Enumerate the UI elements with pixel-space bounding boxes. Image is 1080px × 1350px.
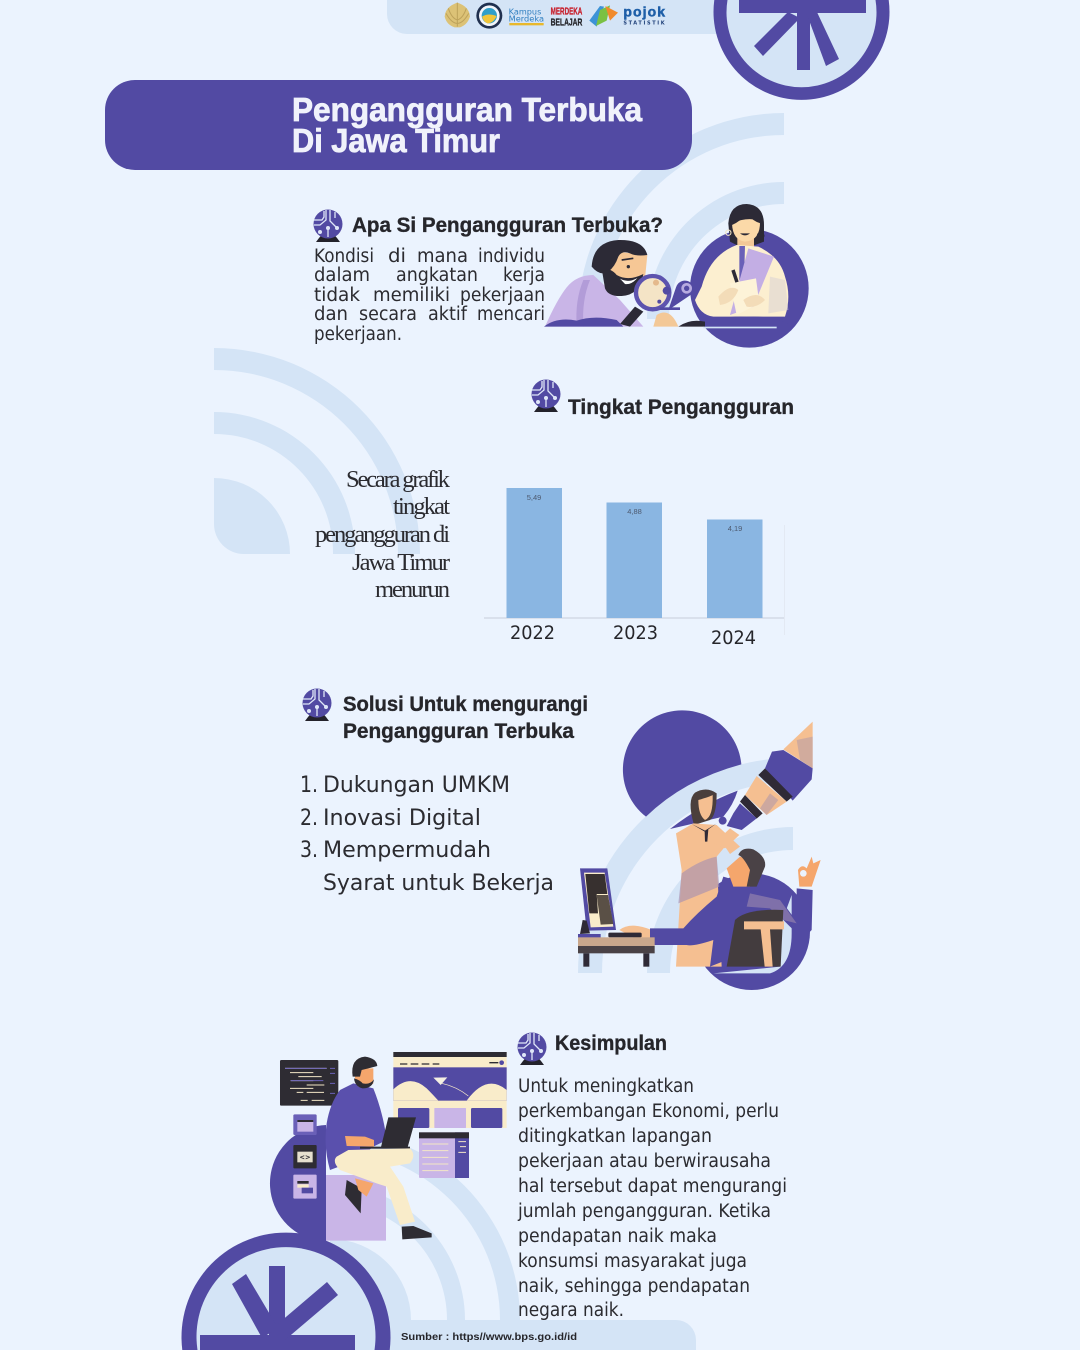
logo: Merdeka Belajar: BELAJAR [551, 17, 583, 28]
section: unemployment rate [532, 380, 794, 419]
footer bar [380, 1320, 696, 1350]
bar: 2023: 4,88 [627, 507, 642, 516]
decoration: signal arcs upper right [578, 113, 784, 319]
text block: definition: dan [314, 304, 348, 325]
text block: conclusion: ditingkatkan lapangan [518, 1126, 712, 1147]
source note: Sumber : https//www.bps.go.id/id [401, 1331, 577, 1343]
illustration: developer at laptop [270, 1052, 507, 1241]
document panel [419, 1132, 469, 1178]
man [619, 849, 821, 967]
logo: Tut Wuri Handayani [445, 3, 470, 27]
title: Pengangguran Terbuka [292, 91, 643, 128]
logo bar [387, 0, 721, 34]
bar: 2024: 4,19 [728, 524, 742, 533]
text block: chart commentary: menurun [375, 576, 450, 603]
code panel [280, 1060, 338, 1106]
text block: chart commentary [315, 466, 451, 603]
telescope [727, 722, 813, 830]
text block: definition: pekerjaan [460, 285, 545, 306]
title [292, 91, 643, 159]
bar: 2023 [606, 502, 662, 618]
heading: solutions: Pengangguran Terbuka [343, 719, 575, 743]
logo: Pojok Statistik: STATISTIK [623, 21, 666, 27]
text block: chart commentary: pengangguran di [315, 521, 450, 548]
text block: chart commentary: tingkat [393, 493, 450, 520]
bar: 2022 [506, 488, 562, 618]
text block: definition: dalam [314, 265, 370, 286]
half moon [623, 710, 741, 817]
list: solutions: 3. [300, 837, 318, 863]
heading: conclusion: Kesimpulan [555, 1031, 667, 1055]
logo: Kampus Merdeka [509, 7, 544, 25]
illustration: telescope and astronomers [578, 710, 821, 990]
ground [544, 316, 794, 327]
bar: 2024 [707, 520, 762, 618]
list: solutions: 2. [300, 805, 318, 831]
title: Di Jawa Timur [292, 122, 500, 159]
logo: Pojok Statistik: pojok [623, 4, 665, 20]
heading: solutions: Solusi Untuk mengurangi [343, 692, 588, 716]
logo: Kampus Merdeka: Kampus [509, 7, 541, 16]
list: solutions: Syarat untuk Bekerja [323, 870, 554, 896]
text block: definition: memiliki [373, 285, 450, 306]
text block: conclusion: jumlah pengangguran. Ketika [517, 1201, 771, 1222]
text block: definition: mana [417, 246, 468, 267]
text block: conclusion: hal tersebut dapat mengurangi [518, 1176, 787, 1197]
magnifier and pin [620, 276, 694, 327]
illustration: researchers with magnifier [544, 204, 809, 348]
list: solutions: Dukungan UMKM [323, 772, 510, 798]
icon: circuit globe [314, 210, 342, 242]
desk and monitor [578, 868, 655, 967]
list: solutions: Inovasi Digital [323, 805, 481, 831]
text block: definition: individu [478, 246, 545, 267]
text block: conclusion: negara naik. [518, 1300, 624, 1321]
logo: Merdeka Belajar [551, 7, 583, 28]
axis labels [510, 622, 756, 649]
woman [676, 789, 740, 967]
text block: conclusion: naik, sehingga pendapatan [518, 1276, 750, 1297]
box seat [326, 1175, 386, 1241]
text block: conclusion: pendapatan naik maka [518, 1226, 717, 1247]
text block: conclusion: pekerjaan atau berwirausaha [518, 1151, 771, 1172]
text block: definition: pekerjaan. [314, 324, 402, 345]
list: solutions [300, 772, 554, 896]
decoration: signal arcs middle left [214, 348, 420, 554]
small cards [293, 1114, 317, 1199]
text block: definition [314, 246, 545, 345]
man [545, 240, 647, 327]
text block: definition: Kondisi [314, 246, 374, 267]
decoration: signal arcs lower right [578, 758, 793, 973]
text block: chart commentary: Jawa Timur [352, 549, 450, 576]
small cards: <> [299, 1153, 311, 1161]
list: solutions: 1. [300, 772, 318, 798]
text block: conclusion: konsumsi masyarakat juga [518, 1251, 747, 1272]
logo: Pojok Statistik [623, 4, 666, 27]
section: solutions [300, 688, 588, 896]
section: definition [314, 210, 663, 345]
chair [727, 910, 784, 967]
emblem: ring bottom left [182, 1233, 390, 1350]
text block: conclusion: Untuk meningkatkan [518, 1076, 694, 1097]
logo: university badge [476, 3, 502, 29]
icon: circuit globe [518, 1032, 546, 1065]
axis labels: 2024 [711, 627, 756, 649]
icon: circuit globe [532, 380, 560, 412]
logo: Kampus Merdeka: Merdeka [509, 14, 544, 23]
text block: definition: angkatan [396, 265, 478, 286]
text block: chart commentary: Secara grafik [346, 466, 451, 493]
text block: conclusion [517, 1076, 787, 1321]
ring [693, 873, 810, 990]
text block: definition: tidak [314, 285, 360, 306]
bar: 2022: 5,49 [527, 493, 541, 502]
text block: definition: secara [359, 304, 417, 325]
logo: Merdeka Belajar: MERDEKA [551, 7, 583, 18]
legs [335, 1148, 432, 1239]
text block: definition: di [388, 246, 406, 267]
text block: definition: aktif [428, 304, 467, 325]
woman [695, 204, 788, 317]
emblem: ring top right [714, 0, 890, 100]
heading: solutions [343, 692, 588, 743]
text block: definition: kerja [503, 265, 545, 286]
heading: definition: Apa Si Pengangguran Terbuka? [352, 213, 663, 237]
list: solutions: Mempermudah [323, 837, 491, 863]
text block: definition: mencari [477, 304, 545, 325]
purple circle [270, 1125, 326, 1241]
website panel [393, 1052, 507, 1128]
bar chart [484, 488, 784, 649]
section: conclusion [517, 1031, 787, 1321]
axis labels: 2023 [613, 622, 658, 644]
axis labels: 2022 [510, 622, 555, 644]
logo: BPS [589, 5, 618, 27]
decoration: signal arcs bottom [330, 1130, 520, 1320]
title banner [105, 80, 692, 170]
icon: circuit globe [302, 688, 332, 721]
developer [326, 1057, 416, 1170]
text block: conclusion: perkembangan Ekonomi, perlu [518, 1101, 779, 1122]
heading: unemployment rate: Tingkat Pengangguran [568, 395, 794, 419]
